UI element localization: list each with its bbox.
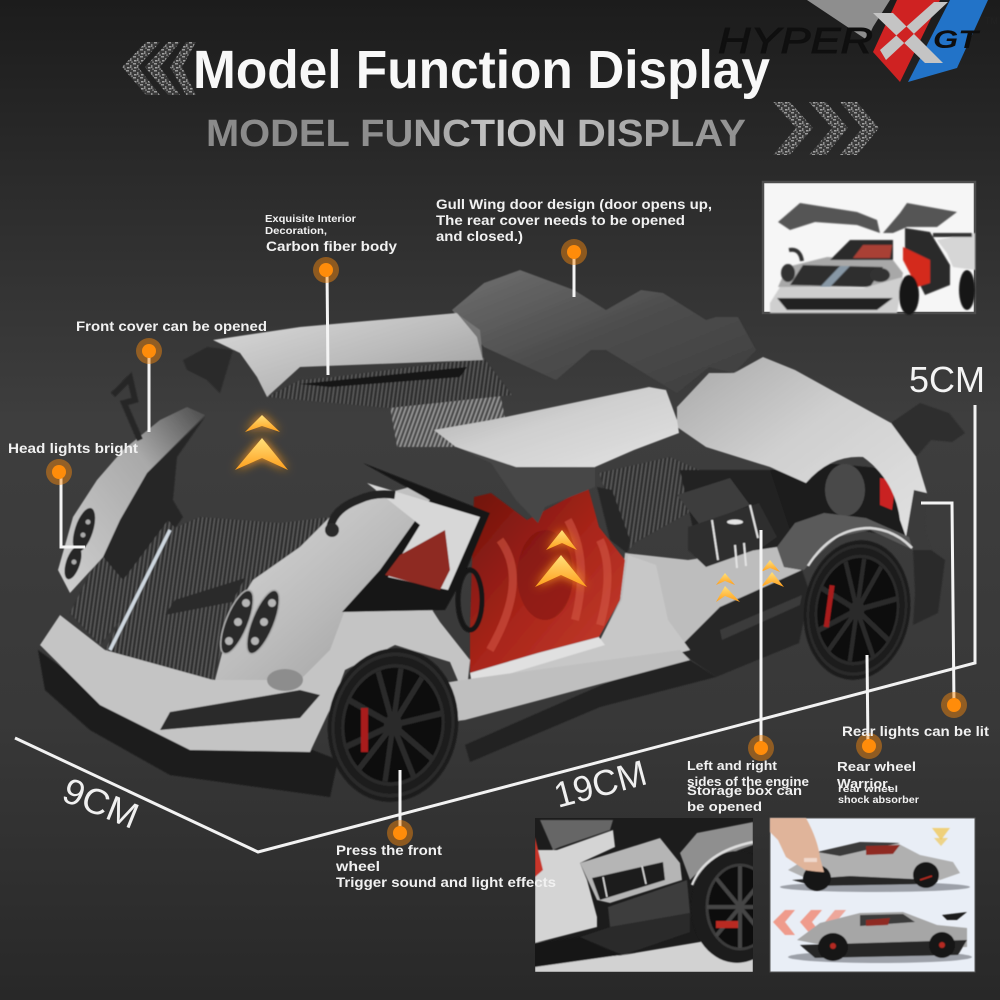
shadows (780, 882, 970, 892)
rear brake caliper (824, 585, 835, 627)
brand logo: GT (933, 26, 982, 54)
callout lines (61, 252, 954, 833)
glow chevrons: storage right (761, 560, 784, 587)
label: rear wheel shock: Rear wheel (837, 759, 916, 774)
label: interior and carbon fiber: Exquisite Interior (265, 214, 356, 225)
label: gull wing door: The rear cover needs to be opened (436, 212, 685, 228)
glow chevrons: storage left (716, 573, 740, 602)
near headlight cluster (214, 586, 286, 658)
subtitle: MODEL FUNCTION DISPLAY (206, 113, 746, 155)
glow chevrons: door (535, 530, 587, 587)
red left chevrons (773, 910, 795, 935)
label: interior and carbon fiber: Carbon fiber body (266, 238, 397, 254)
label: storage box: be opened (687, 799, 762, 814)
rear wheel arch interior (700, 463, 912, 540)
rear fender (777, 513, 913, 570)
label: storage box (687, 758, 809, 814)
label: head lights: Head lights bright (8, 440, 138, 456)
dimension: 19CM: 19CM (549, 752, 651, 816)
storage tray (580, 838, 682, 903)
red interior strip (535, 837, 543, 877)
carbon panel behind door (599, 457, 699, 553)
glow chevrons: front hood (235, 415, 288, 470)
left hood carbon (103, 417, 205, 580)
label: rear wheel shock: rear wheel (838, 784, 898, 794)
rear fender (680, 822, 753, 880)
callout dots (46, 239, 967, 846)
label: gull wing door (436, 196, 712, 244)
left title chevrons (122, 42, 196, 95)
label: gull wing door: Gull Wing door design (door opens up, (436, 196, 712, 212)
left raised door (778, 203, 880, 233)
dimension: 5CM: 5CM (909, 359, 985, 400)
storage roll (592, 862, 665, 900)
far open door window/hatch panel (390, 393, 511, 447)
headlights (781, 264, 795, 282)
near gull-wing door top (434, 387, 679, 467)
front lower body (40, 560, 470, 752)
rear body shell (677, 357, 927, 537)
storage box (688, 503, 777, 568)
inset: engine storage box close-up (535, 818, 753, 972)
label: storage box: sides of the engine (687, 774, 809, 789)
label: interior and carbon fiber (265, 214, 397, 254)
sill (465, 555, 690, 710)
carbon sill (465, 652, 716, 762)
side skirt (677, 570, 810, 677)
body top (778, 257, 903, 287)
label: rear wheel shock: shock absorber (838, 795, 919, 806)
bumper (770, 277, 903, 313)
right raised door (883, 203, 957, 233)
car side view lower (797, 912, 967, 950)
left door carbon underside (267, 357, 512, 408)
inset: press-wheel demonstration (770, 818, 975, 972)
hood (790, 265, 883, 287)
car side view upper (788, 842, 960, 880)
dimension: 9CM: 9CM (57, 769, 145, 837)
label: rear wheel shock (837, 759, 919, 806)
left door silver top (213, 313, 483, 397)
open front door hinge (183, 347, 233, 393)
box cover (608, 880, 690, 927)
rear bumper (913, 550, 945, 625)
label: rear wheel shock: Warrior, (837, 776, 891, 791)
silver side (535, 830, 615, 943)
hood mirror (113, 378, 140, 440)
rear wing (891, 403, 965, 457)
label: storage box: Left and right (687, 758, 778, 773)
near wing mirror (330, 494, 395, 530)
hand (770, 818, 824, 872)
label: gull wing door: and closed.) (436, 228, 523, 244)
main carbon hood (105, 517, 330, 680)
engine bay (680, 470, 790, 560)
label: press front wheel: Trigger sound and light effects (336, 874, 556, 890)
wheels (899, 275, 919, 315)
far gull-wing door (452, 270, 756, 393)
rear body (937, 233, 975, 270)
label: press front wheel: wheel (335, 858, 380, 874)
label: front cover: Front cover can be opened (76, 318, 267, 334)
mirror (789, 250, 802, 261)
brand logo: TM (985, 16, 998, 26)
near gull-wing door underside (456, 447, 595, 523)
label: press front wheel (335, 842, 556, 890)
front brake caliper (361, 708, 368, 752)
interior red (470, 487, 625, 673)
door edge pillar (597, 487, 630, 553)
brand logo (718, 0, 998, 82)
front splitter (38, 650, 338, 797)
label: interior and carbon fiber: Decoration, (265, 226, 327, 237)
label: press front wheel: Press the front (336, 842, 442, 858)
wheel (694, 850, 753, 964)
dimension lines (15, 405, 975, 852)
near front fender (215, 487, 437, 680)
title: Model Function Display (193, 40, 770, 100)
rear wheel (795, 533, 919, 687)
left headlight cluster (61, 505, 100, 581)
open hood silver (58, 407, 205, 593)
window frame (342, 463, 490, 612)
seat (903, 247, 930, 287)
carbon panel (540, 820, 613, 850)
down chevron (932, 828, 950, 840)
rear side panel (600, 547, 802, 670)
inset: front three-quarter view (763, 182, 975, 315)
label: rear lights: Rear lights can be lit (842, 723, 989, 739)
right title chevrons (773, 102, 879, 155)
car: gull-wing hero model (38, 270, 965, 810)
floor (535, 940, 753, 972)
label: storage box: Storage box can (687, 783, 802, 798)
steering wheel (458, 570, 482, 630)
brand logo: HYPER (718, 20, 873, 61)
front wheel (318, 640, 468, 810)
glass (830, 240, 893, 260)
